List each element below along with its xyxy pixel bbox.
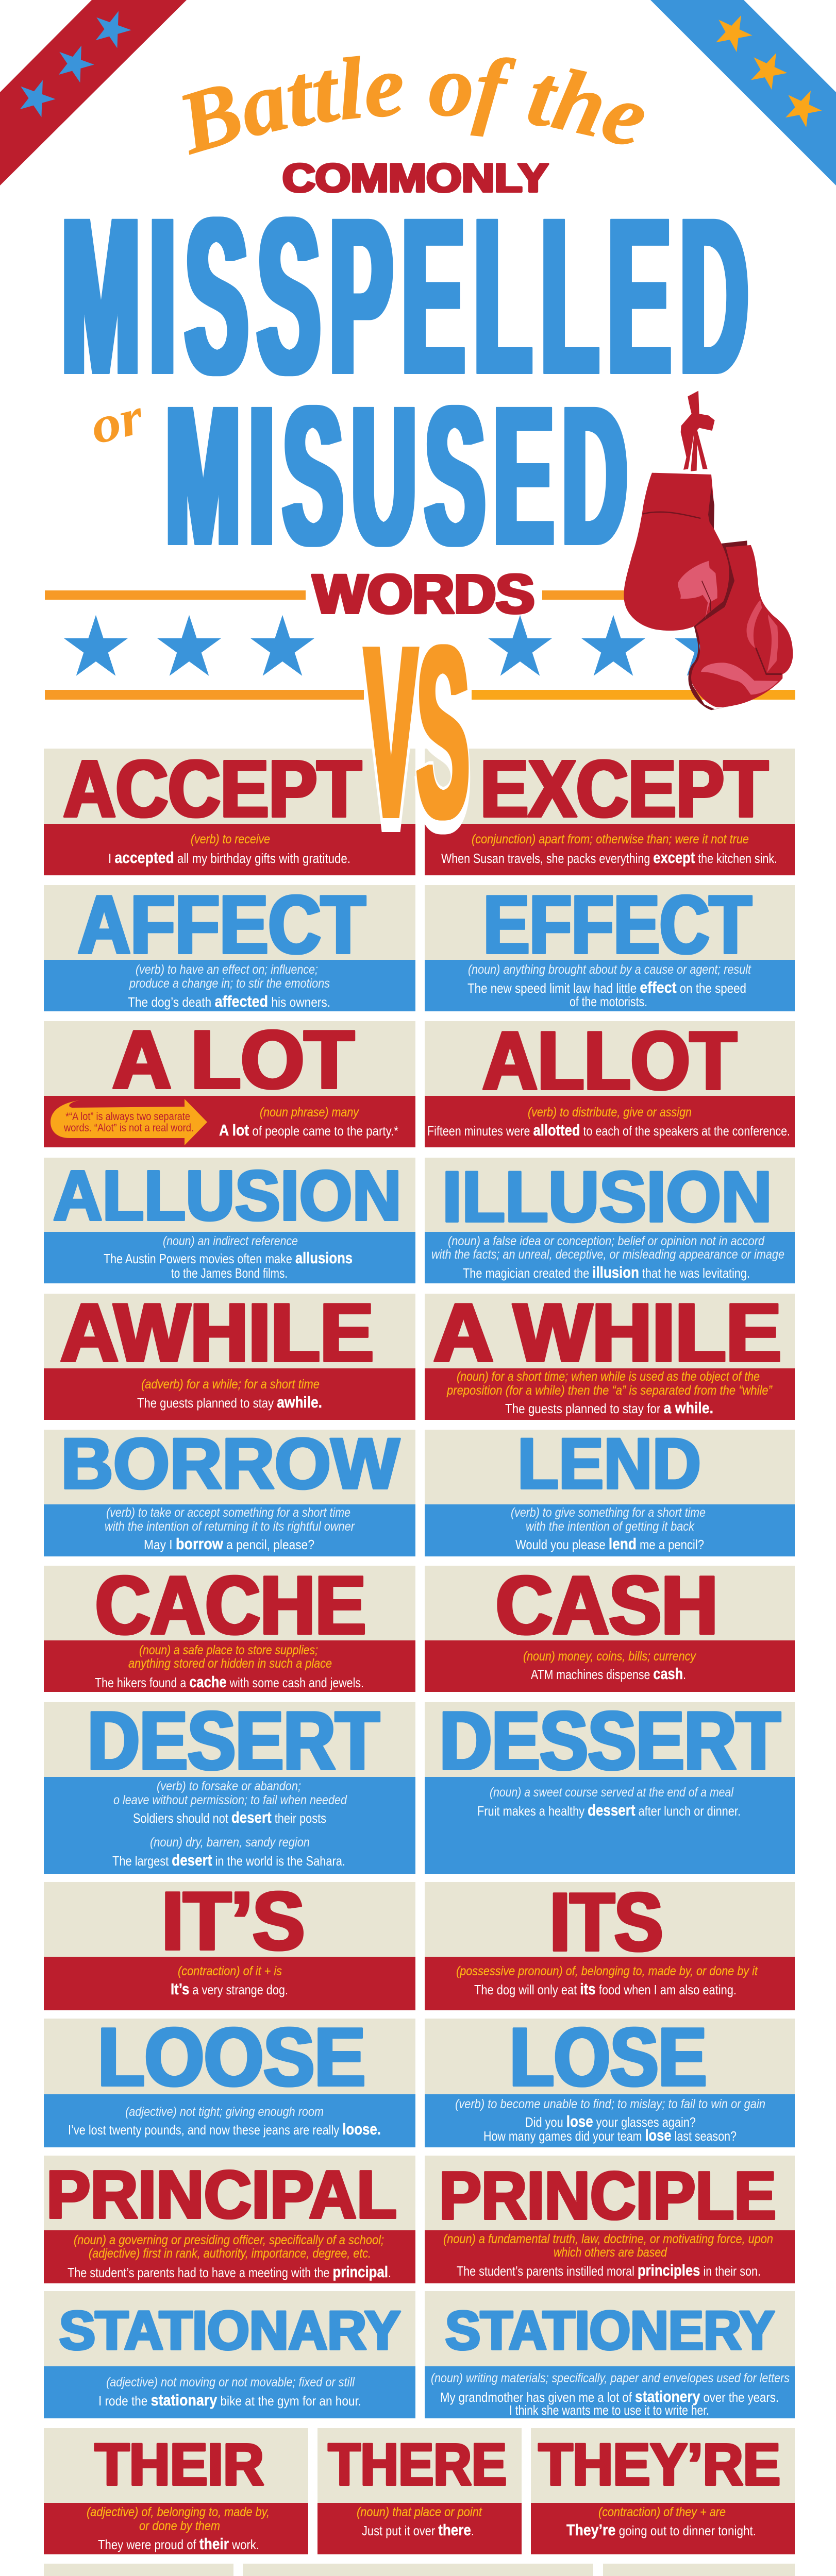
definition: cash	[523, 1649, 696, 1683]
definition: lend: Would you please lend me a pencil?	[515, 1535, 704, 1553]
definition: a while	[446, 1369, 773, 1417]
definition: principle: (noun) a fundamental truth, law, doctrine, or motivating force, upon	[443, 2232, 773, 2246]
definition: stationary	[98, 2375, 361, 2409]
definition: a while: preposition (for a while) then the “a” is separated from the “while”	[446, 1383, 773, 1398]
heading: LEND: LEND	[517, 1423, 701, 1504]
definition: illusion: with the facts; an unreal, deceptive, or misleading appearance or image	[431, 1247, 784, 1262]
heading: PRINCIPAL: PRINCIPAL	[46, 2157, 397, 2232]
heading: STATIONERY: STATIONERY	[445, 2299, 775, 2361]
title: Battle of the: Battle of the	[182, 56, 644, 155]
definition: desert: o leave without permission; to fail when needed	[113, 1793, 347, 1807]
panel: AWHILE	[44, 1286, 415, 1420]
panel: PRINCIPAL	[44, 2156, 415, 2283]
definition: desert: Soldiers should not desert their posts	[133, 1808, 326, 1826]
definition: except: (conjunction) apart from; otherwise than; were it not true	[472, 832, 749, 846]
definition: stationary: (adjective) not moving or not movable; fixed or still	[106, 2375, 355, 2389]
definition: stationery	[431, 2371, 790, 2418]
definition: it's: It’s a very strange dog.	[171, 1980, 288, 1998]
title: Battle of the	[182, 56, 644, 155]
heading: DESSERT: DESSERT	[440, 1694, 780, 1787]
icon: VS emblem	[365, 597, 469, 877]
definition: lose: How many games did your team lose last season?	[483, 2126, 737, 2144]
heading: PRINCIPLE: PRINCIPLE	[439, 2158, 776, 2233]
panel: THERE	[317, 2428, 522, 2554]
panel: STATIONERY	[425, 2291, 795, 2418]
definition: desert	[112, 1779, 347, 1869]
definition: affect: produce a change in; to stir the emotions	[129, 976, 330, 991]
definition: allot: (verb) to distribute, give or assign	[528, 1105, 692, 1120]
definition: cache	[95, 1643, 364, 1691]
panel: LEND	[425, 1423, 795, 1556]
definition: principal: (adjective) first in rank, authority, importance, degree, etc.	[89, 2246, 371, 2261]
definition: desert: (noun) dry, barren, sandy region	[150, 1835, 310, 1850]
definition: allot: Fifteen minutes were allotted to each of the speakers at the conference.	[427, 1121, 790, 1139]
definition: effect: of the motorists.	[570, 994, 647, 1009]
heading: ITS: ITS	[550, 1876, 663, 1969]
panel: DESERT	[44, 1694, 415, 1874]
panel: TOO	[243, 2564, 593, 2576]
definition: accept: (verb) to receive	[191, 832, 270, 846]
panel: TO	[44, 2564, 233, 2576]
definition: dessert: (noun) a sweet course served at the end of a meal	[490, 1785, 734, 1800]
definition: affect: The dog’s death affected his owners.	[128, 992, 330, 1010]
definition: its: (possessive pronoun) of, belonging to, made by, or done by it	[456, 1964, 758, 1978]
definition: they're	[566, 2505, 756, 2539]
definition: principal: The student’s parents had to have a meeting with the principal.	[68, 2263, 391, 2281]
panel: TWO	[603, 2564, 795, 2576]
definition: a lot: A lot of people came to the party.*	[219, 1121, 398, 1139]
definition: stationery: I think she wants me to use it to write her.	[509, 2402, 709, 2418]
definition: effect	[467, 962, 751, 1009]
definition: desert: The largest desert in the world is the Sahara.	[112, 1851, 345, 1869]
definition: a while: (noun) for a short time; when while is used as the object of the	[457, 1369, 760, 1384]
definition: illusion: The magician created the illusion that he was levitating.	[463, 1263, 750, 1281]
definition: desert: (verb) to forsake or abandon;	[157, 1779, 301, 1793]
panel: THEIR	[44, 2428, 308, 2554]
icon: glove laces	[681, 391, 715, 471]
definition: dessert	[477, 1785, 741, 1819]
definition: it's: (contraction) of it + is	[178, 1964, 282, 1978]
heading: LOOSE: LOOSE	[98, 2011, 365, 2104]
definition: dessert: Fruit makes a healthy dessert after lunch or dinner.	[477, 1801, 741, 1819]
panel: ALLUSION	[44, 1156, 415, 1283]
callout: arrow note: words. “Alot” is not a real word.	[63, 1122, 194, 1134]
definition: a lot	[219, 1105, 398, 1139]
heading: ILLUSION: ILLUSION	[442, 1156, 772, 1237]
panel: EXCEPT	[425, 744, 795, 875]
definition: accept	[108, 832, 350, 867]
ribbon: top right blue with stars	[650, 0, 836, 185]
definition: a while: The guests planned to stay for a while.	[505, 1399, 713, 1417]
panel: ACCEPT	[44, 744, 415, 875]
definition: their: (adjective) of, belonging to, made by,	[87, 2505, 270, 2519]
panel: IT'S	[44, 1875, 415, 2010]
panel: STATIONARY	[44, 2291, 415, 2418]
panel: A LOT	[44, 1013, 415, 1147]
heading: EXCEPT: EXCEPT	[480, 744, 768, 834]
panel: ALLOT	[425, 1014, 795, 1147]
panel: PRINCIPLE	[425, 2156, 795, 2283]
definition: allusion: The Austin Powers movies often make allusions	[104, 1249, 353, 1267]
definition: there: (noun) that place or point	[357, 2505, 482, 2519]
title: or: or	[85, 387, 149, 455]
text: VS	[365, 597, 469, 868]
definition: affect	[128, 962, 330, 1010]
definition: principal	[68, 2233, 391, 2281]
definition: except: When Susan travels, she packs everything except the kitchen sink.	[441, 849, 777, 867]
panel: DESSERT	[425, 1694, 795, 1874]
title: COMMONLY: COMMONLY	[282, 155, 548, 200]
definition: allusion: to the James Bond films.	[171, 1265, 288, 1281]
definition: except	[441, 832, 777, 867]
definition: accept: I accepted all my birthday gifts with gratitude.	[108, 849, 350, 867]
panel: AFFECT	[44, 878, 415, 1011]
heading: CASH: CASH	[496, 1559, 718, 1652]
definition: allusion: (noun) an indirect reference	[163, 1234, 298, 1248]
definition: borrow: with the intention of returning it to its rightful owner	[105, 1519, 355, 1534]
heading: EFFECT: EFFECT	[483, 878, 751, 971]
definition: lose: (verb) to become unable to find; to mislay; to fail to win or gain	[455, 2097, 765, 2111]
panel: LOOSE	[44, 2011, 415, 2147]
heading: ALLOT: ALLOT	[482, 1014, 737, 1107]
panel: CASH	[425, 1559, 795, 1692]
definition: borrow	[105, 1505, 355, 1553]
heading: ALLUSION: ALLUSION	[53, 1156, 402, 1235]
definition: their: They were proud of their work.	[98, 2535, 259, 2553]
heading: THEIR: THEIR	[95, 2432, 264, 2498]
definition: stationery: My grandmother has given me a lot of stationery over the years.	[440, 2387, 779, 2405]
definition: effect: (noun) anything brought about by a cause or agent; result	[468, 962, 751, 977]
heading: ACCEPT: ACCEPT	[63, 744, 361, 834]
definition: it's	[171, 1964, 288, 1998]
definition: principal: (noun) a governing or presiding officer, specifically of a school;	[74, 2233, 384, 2247]
panel: CACHE	[44, 1559, 415, 1692]
definition: they're: They’re going out to dinner tonight.	[566, 2521, 756, 2539]
heading: THERE: THERE	[328, 2432, 507, 2498]
title: WORDS: WORDS	[313, 563, 534, 625]
definition: awhile: (adverb) for a while; for a short time	[141, 1377, 320, 1392]
definition: lend	[511, 1505, 706, 1553]
definition: cash: ATM machines dispense cash.	[531, 1665, 686, 1683]
definition: their: or done by them	[139, 2519, 220, 2533]
definition: awhile	[137, 1377, 322, 1411]
heading: STATIONARY: STATIONARY	[59, 2299, 400, 2361]
ribbon: top left red with stars	[0, 0, 187, 185]
heading: BORROW: BORROW	[61, 1423, 399, 1504]
definition: a lot: (noun phrase) many	[260, 1105, 359, 1120]
heading: A WHILE: A WHILE	[433, 1286, 781, 1379]
panel: BORROW	[44, 1423, 415, 1556]
definition: borrow: May I borrow a pencil, please?	[144, 1535, 314, 1553]
definition: lose	[455, 2097, 765, 2144]
definition: lend: with the intention of getting it back	[526, 1519, 695, 1534]
definition: loose: I’ve lost twenty pounds, and now these jeans are really loose.	[68, 2120, 381, 2138]
panel: A WHILE	[425, 1286, 795, 1420]
definition: their	[87, 2505, 270, 2553]
divider bars and star row	[45, 590, 795, 700]
heading: DESERT: DESERT	[88, 1694, 379, 1787]
heading: AWHILE: AWHILE	[60, 1286, 374, 1379]
definition: borrow: (verb) to take or accept something for a short time	[106, 1505, 350, 1520]
definition: principle: The student’s parents instilled moral principles in their son.	[457, 2261, 761, 2279]
definition: affect: (verb) to have an effect on; influence;	[136, 962, 318, 977]
definition: loose	[68, 2105, 381, 2138]
definition: principle	[443, 2232, 773, 2279]
definition: illusion: (noun) a false idea or conception; belief or opinion not in accord	[448, 1234, 765, 1248]
definition: effect: The new speed limit law had little effect on the speed	[467, 978, 746, 996]
definition: cache: The hikers found a cache with some cash and jewels.	[95, 1673, 364, 1691]
panel: LOSE	[425, 2011, 795, 2147]
text: VS	[365, 597, 469, 868]
definition: there	[357, 2505, 482, 2539]
definition: allot	[427, 1105, 790, 1139]
heading: A LOT: A LOT	[112, 1013, 354, 1106]
heading: AFFECT: AFFECT	[78, 878, 365, 971]
definition: its: The dog will only eat its food when I am also eating.	[474, 1980, 737, 1998]
definition: stationary: I rode the stationary bike at the gym for an hour.	[98, 2391, 361, 2409]
definition: cache: (noun) a safe place to store supplies;	[139, 1643, 318, 1657]
definition: they're: (contraction) of they + are	[598, 2505, 726, 2519]
definition: principle: which others are based	[554, 2245, 667, 2260]
text: VS	[365, 606, 469, 877]
definition: loose: (adjective) not tight; giving enough room	[125, 2105, 324, 2119]
heading: LOSE: LOSE	[510, 2011, 707, 2104]
panel: EFFECT	[425, 878, 795, 1011]
definition: lose: Did you lose your glasses again?	[525, 2112, 696, 2130]
panel: THEY'RE	[531, 2428, 795, 2554]
definition: cash: (noun) money, coins, bills; currency	[523, 1649, 696, 1664]
heading: IT'S: IT’S	[162, 1875, 305, 1968]
definition: its	[456, 1964, 758, 1998]
icon: boxing gloves	[624, 391, 793, 710]
definition: awhile: The guests planned to stay awhile.	[137, 1393, 322, 1411]
heading: CACHE: CACHE	[95, 1559, 366, 1652]
heading: THEY'RE: THEY’RE	[539, 2432, 780, 2498]
definition: allusion	[104, 1234, 353, 1281]
panel: ITS	[425, 1876, 795, 2010]
definition: cache: anything stored or hidden in such a place	[128, 1656, 332, 1671]
definition: lend: (verb) to give something for a short time	[511, 1505, 706, 1520]
definition: illusion	[431, 1234, 784, 1281]
callout: arrow note	[51, 1099, 207, 1145]
definition: there: Just put it over there.	[362, 2521, 474, 2539]
callout: arrow note: *“A lot” is always two separate	[65, 1111, 190, 1123]
panel: ILLUSION	[425, 1156, 795, 1283]
